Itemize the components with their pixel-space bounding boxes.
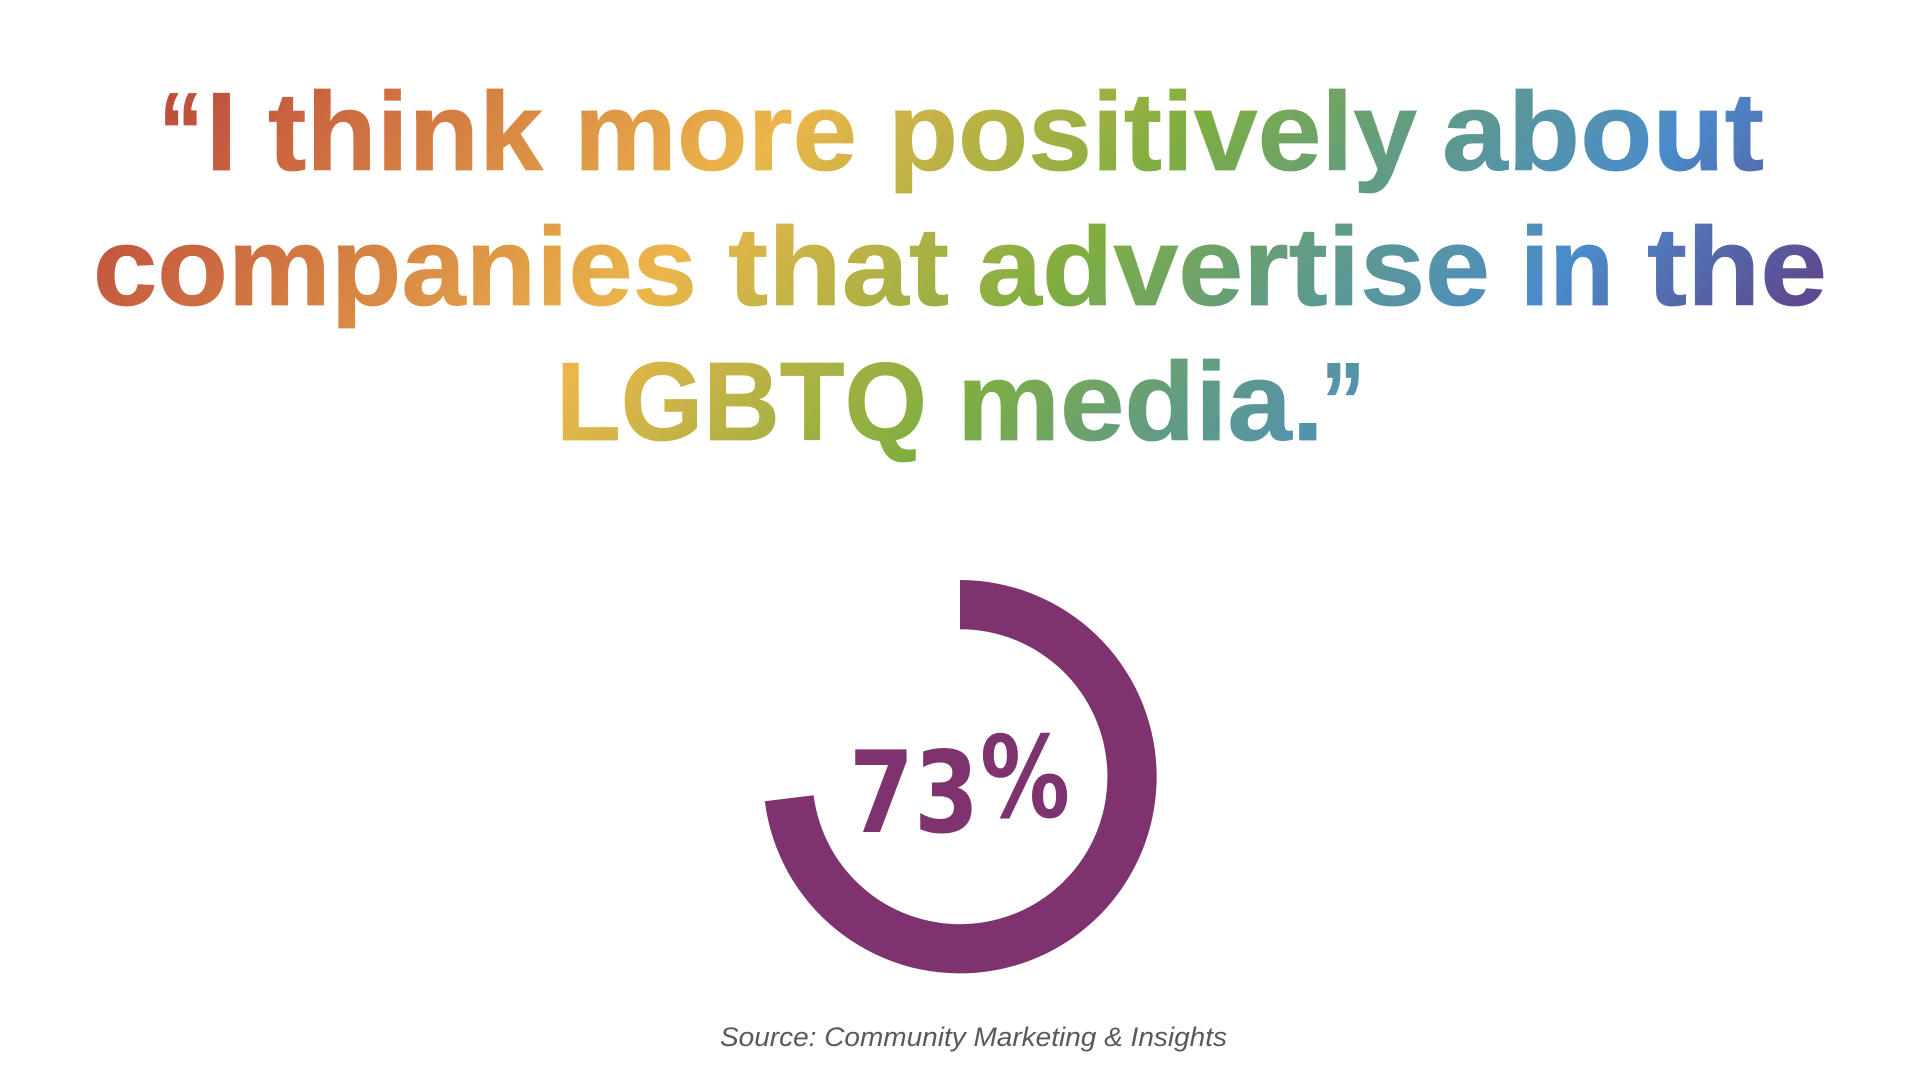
headline line 3: media.	[957, 340, 1324, 464]
headline line 1: think	[268, 70, 543, 194]
headline line 1: “	[159, 70, 203, 194]
headline line 1: about	[1442, 70, 1764, 194]
donut arc	[765, 580, 1157, 973]
value label 73%: 73	[849, 727, 979, 859]
headline line 1: more	[574, 70, 857, 194]
title: rainbow quote headline	[93, 70, 1827, 464]
headline line 2: that	[728, 205, 949, 329]
headline line 1	[159, 70, 1764, 194]
headline line 1: I	[206, 70, 237, 194]
headline line 2: in	[1520, 205, 1614, 329]
source note: Source: Community Marketing & Insights	[720, 1022, 1227, 1052]
headline line 1: positively	[888, 70, 1417, 194]
headline line 3	[556, 340, 1365, 464]
chart: 73 percent donut	[765, 580, 1157, 973]
value label 73%	[849, 712, 1070, 859]
value label 73%: %	[980, 712, 1070, 844]
headline line 2: the	[1647, 205, 1827, 329]
headline line 2: companies	[93, 205, 697, 329]
headline line 2	[93, 205, 1827, 329]
headline line 3: ”	[1321, 340, 1365, 464]
headline line 3: LGBTQ	[556, 340, 927, 464]
headline line 2: advertise	[977, 205, 1490, 329]
